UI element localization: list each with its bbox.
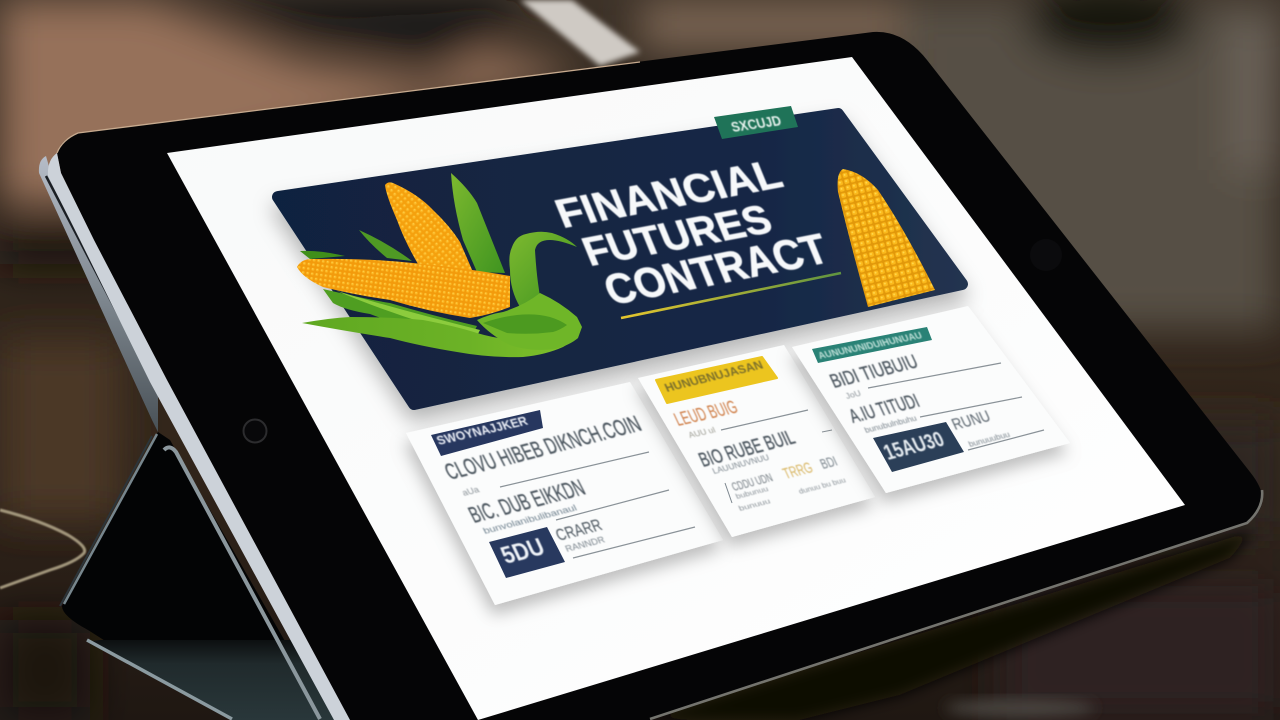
tablet stand: [60, 432, 345, 720]
middle card orange heading: LEUD BUIG: [671, 397, 741, 431]
hand: [0, 0, 580, 205]
top edge highlight: [57, 62, 640, 153]
panel: middle card: LAUUNUVNUU: [711, 452, 771, 476]
infographic banner: [278, 114, 962, 404]
title underline: [621, 273, 841, 318]
panel: middle card: bunuuu: [737, 497, 772, 513]
panel: left card: [406, 382, 723, 605]
panel: left card: RANNDR: [564, 535, 607, 555]
panel: left card: CRARR: [552, 515, 605, 545]
panel: left card: aUa: [460, 485, 481, 498]
left card second line: BIC. DUB EIKKDN: [464, 475, 590, 528]
title text: CONTRACT: [597, 225, 835, 314]
tall leaf: [451, 173, 505, 273]
left card value box: [489, 527, 565, 578]
right card second line: A.IU TITUDI: [846, 391, 923, 428]
title text: FINANCIAL: [549, 151, 789, 236]
panel: middle card: AUU ul: [687, 425, 717, 440]
left card tag: SWOYNAJJKER: [434, 413, 531, 448]
illustration: right corn ear: [838, 169, 935, 307]
outer silver side band: [39, 156, 158, 432]
panel: middle card: TRRG: [781, 460, 816, 483]
panel: right card: RUNU: [949, 407, 993, 434]
front camera: [244, 420, 266, 442]
middle husk leaf: [323, 289, 477, 340]
bright silver side edge: [48, 153, 350, 720]
panel: middle card: [638, 345, 875, 537]
title text: FUTURES: [576, 196, 778, 274]
right husk fold: [477, 293, 582, 350]
pencil: [520, 0, 640, 66]
far-left thin leaf: [300, 251, 345, 259]
charging cable: [0, 510, 85, 588]
panel: right card: bunubulnbuhu: [863, 413, 919, 435]
tablet screen: [167, 57, 1185, 720]
middle card tag: HUNUBNUJASAN: [662, 358, 765, 395]
illustration: corn cob group: [297, 173, 582, 357]
right card value box: 15AU30: [880, 427, 948, 465]
table shadow below tablet: [640, 530, 1255, 720]
left card value box: 5DU: [497, 534, 549, 569]
middle card small detail: CDDU UDN: [729, 471, 775, 494]
inner husk fold: [483, 314, 567, 334]
dark object behind hand: [248, 0, 524, 48]
upper corn ear: [385, 182, 473, 272]
lower rim highlight: [650, 490, 1262, 719]
panel: middle card: BDI: [818, 453, 840, 473]
horizontal corn ear: [297, 259, 510, 318]
title text: [549, 151, 835, 314]
middle card second line: BIO RUBE BUIL: [695, 426, 799, 472]
bottom husk leaf: [302, 317, 578, 357]
small badge at top of banner: [714, 106, 798, 139]
right card tag: AUNUNUNIDUIHUNUAU: [817, 331, 924, 362]
panel: left card: bunvolanibulibanaul: [481, 502, 579, 536]
side sensor: [1030, 239, 1062, 271]
curled leaf: [509, 232, 577, 307]
right card heading: BIDI TIUBUIU: [827, 352, 921, 393]
panel: right card: JoU: [844, 388, 862, 401]
panel: middle card: bubunuu: [734, 484, 770, 501]
stand base panel: [87, 640, 345, 720]
panel: right card: [792, 306, 1070, 493]
panel: middle card: dunuu bu buu: [797, 476, 847, 496]
panel: right card: bunuuubuu: [967, 429, 1012, 449]
small left leaf: [359, 230, 412, 261]
husk highlight: [337, 291, 480, 338]
small badge at top of banner: SXCUJD: [729, 113, 784, 136]
left card heading: CLOVU HIBEB DIKNCH.COIN: [440, 411, 646, 485]
